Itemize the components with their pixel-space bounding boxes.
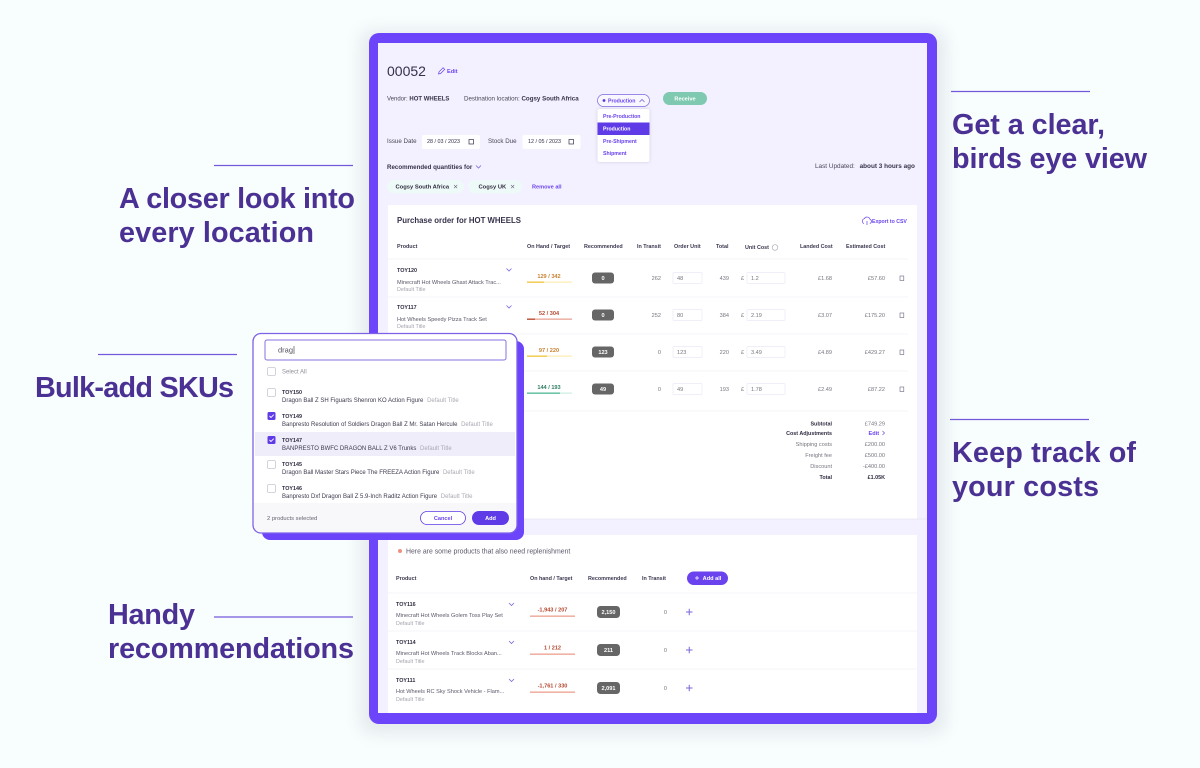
- row: TOY120: 1.2: [751, 276, 759, 282]
- date fields: [387, 135, 580, 149]
- row: third product: 0: [658, 350, 661, 356]
- cost totals: -£400.00: [863, 464, 885, 470]
- row: TOY117: 2.19: [751, 313, 762, 319]
- item: TOY149: Banpresto Resolution of Soldiers Dragon Ball Z Mr. Satan Hercule Default Title: [282, 422, 493, 428]
- panel: bulk-add SKUs modal: [253, 334, 524, 540]
- status dropdown: Production: [603, 126, 630, 132]
- receive button: [663, 92, 707, 105]
- row: TOY120: £1.68: [818, 276, 832, 282]
- export to CSV link: [862, 217, 907, 225]
- row: fourth product: 0: [658, 387, 661, 393]
- recommended quantities selector: Recommended quantities for: [387, 164, 473, 171]
- heading: get a clear, birds eye view: [951, 92, 1148, 175]
- search input: [265, 340, 506, 360]
- row: TOY111: [388, 669, 917, 703]
- location chips: Cogsy UK: [478, 185, 507, 191]
- row: TOY117: TOY117: [397, 305, 417, 311]
- date fields: 12 / 05 / 2023: [528, 139, 561, 145]
- row: fourth product: [388, 371, 908, 394]
- row: TOY117: 384: [720, 313, 729, 319]
- location chips: [387, 180, 562, 194]
- date fields: Stock Due: [488, 138, 517, 145]
- cost totals: Edit: [868, 431, 879, 437]
- table header: Landed Cost: [800, 244, 833, 250]
- table header: [397, 244, 885, 251]
- cost totals: £749.29: [865, 422, 885, 428]
- row: TOY117: Hot Wheels Speedy Pizza Track Set: [397, 317, 487, 323]
- row: third product: 3.49: [751, 350, 762, 356]
- panel: app window frame: [360, 30, 946, 734]
- receive button: Receive: [674, 96, 696, 102]
- add all button: Add all: [703, 576, 722, 582]
- row: TOY114: Minecraft Hot Wheels Track Blocks Aban...: [396, 651, 502, 657]
- location chips: Remove all: [532, 185, 562, 191]
- cancel button: Cancel: [434, 516, 453, 522]
- export to CSV link: Export to CSV: [872, 219, 907, 225]
- table header: Product: [397, 244, 418, 250]
- item: TOY149: TOY149: [282, 414, 302, 420]
- heading: keep track of your costs: your costs: [952, 471, 1099, 503]
- note: Here are some products that also need replenishment: [406, 548, 570, 556]
- status dropdown: Production: [608, 98, 635, 104]
- row: TOY111: Default Title: [396, 697, 424, 703]
- row: fourth product: 193: [720, 387, 729, 393]
- status dropdown: [598, 94, 650, 162]
- cost totals: £1.05K: [868, 475, 885, 481]
- vendor and destination: Destination location: Cogsy South Africa: [464, 96, 579, 102]
- date fields: 28 / 03 / 2023: [427, 139, 460, 145]
- row: TOY114: 211: [604, 648, 613, 654]
- table header: On hand / Target: [530, 576, 573, 582]
- heading: a closer look into every location: [119, 166, 355, 249]
- row: TOY111: Hot Wheels RC Sky Shock Vehicle - Flam...: [396, 689, 505, 695]
- heading: bulk-add SKUs: Bulk-add SKUs: [35, 372, 234, 404]
- row: TOY114: TOY114: [396, 640, 416, 646]
- item: TOY146: [268, 484, 473, 500]
- item: TOY146: TOY146: [282, 486, 302, 492]
- item: TOY145: Dragon Ball Master Stars Piece The FREEZA Action Figure Default Title: [282, 470, 475, 476]
- row: TOY120: £: [741, 276, 745, 282]
- table header: Product: [396, 576, 417, 582]
- row: third product: £429.27: [865, 350, 885, 356]
- row: TOY117: 252: [652, 313, 661, 319]
- row: TOY114: 1 / 212: [544, 646, 561, 652]
- item: TOY150: Dragon Ball Z SH Figuarts Shenron KO Action Figure Default Title: [282, 398, 459, 404]
- row: fourth product: 1.78: [751, 387, 762, 393]
- table header: Order Unit: [674, 244, 701, 250]
- item: TOY147 selected: [255, 432, 515, 456]
- heading: a closer look into every location: A closer look into: [119, 183, 355, 215]
- last updated: Last Updated: about 3 hours ago: [815, 163, 915, 170]
- vendor and destination: [387, 96, 579, 102]
- row: TOY116: 2,150: [602, 610, 616, 616]
- modal footer: [254, 503, 516, 532]
- heading: handy recommendations: Handy: [108, 599, 195, 631]
- row: TOY116: Minecraft Hot Wheels Golem Toss Play Set: [396, 613, 503, 619]
- table header: Recommended: [588, 576, 627, 582]
- vendor and destination: Vendor: HOT WHEELS: [387, 96, 449, 102]
- status dropdown: Shipment: [603, 151, 627, 157]
- row: TOY117: £: [741, 313, 745, 319]
- row: fourth product: £: [741, 387, 745, 393]
- cancel button: [420, 512, 466, 524]
- item: TOY150: TOY150: [282, 390, 302, 396]
- status dropdown: Pre-Shipment: [603, 139, 637, 145]
- heading: keep track of your costs: [950, 420, 1136, 503]
- row: TOY114: [388, 631, 917, 665]
- item: TOY146: Banpresto Dxf Dragon Ball Z 5.9-Inch Raditz Action Figure Default Title: [282, 494, 473, 500]
- order number: 00052: [387, 63, 426, 79]
- table header: Estimated Cost: [846, 244, 885, 250]
- row: TOY120: £57.60: [868, 276, 885, 282]
- table header: Recommended: [584, 244, 623, 250]
- row: third product: 97 / 220: [539, 348, 559, 354]
- row: fourth product: 49: [600, 387, 606, 393]
- panel: replenishment recommendations: [388, 519, 927, 713]
- row: TOY117: £3.07: [818, 313, 832, 319]
- heading: handy recommendations: recommendations: [108, 633, 354, 665]
- row: TOY117: [388, 297, 908, 330]
- row: third product: £4.89: [818, 350, 832, 356]
- heading: a closer look into every location: every location: [119, 217, 314, 249]
- item: TOY145: TOY145: [282, 462, 302, 468]
- row: TOY120: 439: [720, 276, 729, 282]
- table header: [396, 576, 666, 582]
- cost totals: Cost Adjustments: [786, 431, 832, 437]
- row: TOY116: [388, 593, 917, 627]
- cost totals: Discount: [810, 464, 832, 470]
- cost totals: £200.00: [865, 442, 885, 448]
- cost totals: Subtotal: [810, 422, 832, 428]
- search input: drag: [278, 346, 293, 354]
- row: fourth product: £2.49: [818, 387, 832, 393]
- item: TOY147 selected: BANPRESTO BWFC DRAGON BALL Z V6 Trunks Default Title: [282, 446, 452, 452]
- add all button: [687, 572, 728, 585]
- row: TOY116: 0: [664, 610, 667, 616]
- row: third product: 220: [720, 350, 729, 356]
- row: TOY120: 48: [677, 276, 683, 282]
- row: third product: [388, 334, 908, 358]
- heading: keep track of your costs: Keep track of: [952, 437, 1136, 469]
- row: TOY117: Default Title: [397, 324, 425, 330]
- status dropdown: Pre-Production: [603, 114, 640, 120]
- select all: Select All: [282, 370, 307, 376]
- table header: Total: [716, 244, 729, 250]
- row: third product: £: [741, 350, 745, 356]
- row: TOY116: TOY116: [396, 602, 416, 608]
- add button: [472, 511, 509, 525]
- item: TOY147 selected: TOY147: [282, 438, 302, 444]
- row: TOY117: 52 / 304: [539, 311, 560, 317]
- row: TOY111: 2,091: [602, 686, 616, 692]
- row: TOY117: 0: [601, 313, 605, 319]
- row: TOY116: -1,943 / 207: [538, 608, 567, 614]
- row: TOY120: Minecraft Hot Wheels Ghast Attack Trac...: [397, 280, 501, 286]
- row: third product: 123: [677, 350, 686, 356]
- location chips: Cogsy South Africa: [396, 185, 450, 191]
- cost totals: [786, 422, 885, 481]
- row: TOY117: £175.20: [865, 313, 885, 319]
- row: TOY114: Default Title: [396, 659, 424, 665]
- row: third product: 123: [598, 350, 608, 356]
- date fields: Issue Date: [387, 138, 417, 145]
- table header: Unit Cost: [745, 245, 769, 251]
- table header: On Hand / Target: [527, 244, 570, 250]
- edit link: [438, 68, 458, 75]
- cost totals: £500.00: [865, 453, 885, 459]
- row: TOY116: Default Title: [396, 621, 424, 627]
- row: TOY114: 0: [664, 648, 667, 654]
- cost totals: Shipping costs: [796, 442, 832, 448]
- table header: In Transit: [642, 576, 666, 582]
- row: TOY120: 129 / 342: [537, 274, 561, 280]
- row: TOY111: 0: [664, 686, 667, 692]
- heading: handy recommendations: [108, 599, 354, 665]
- select all: [268, 368, 307, 376]
- cost totals: Freight fee: [805, 453, 832, 459]
- table title: Purchase order for HOT WHEELS: [397, 216, 521, 225]
- heading: get a clear, birds eye view: birds eye view: [952, 143, 1148, 175]
- item: TOY150: [268, 388, 459, 404]
- modal footer: 2 products selected: [267, 516, 317, 522]
- row: TOY117: 80: [677, 313, 683, 319]
- order header: [387, 63, 915, 194]
- item: TOY149: [268, 412, 493, 428]
- add button: Add: [485, 516, 497, 522]
- row: TOY120: Default Title: [397, 287, 425, 293]
- row: fourth product: £87.22: [868, 387, 885, 393]
- table header: In Transit: [637, 244, 661, 250]
- row: TOY120: 0: [601, 276, 605, 282]
- cost totals: Total: [820, 475, 832, 481]
- edit link: Edit: [447, 69, 458, 75]
- panel: purchase order table: [388, 205, 917, 519]
- row: fourth product: 49: [677, 387, 683, 393]
- row: fourth product: 144 / 193: [537, 385, 561, 391]
- row: TOY111: TOY111: [396, 678, 415, 684]
- heading: get a clear, birds eye view: Get a clear,: [952, 109, 1105, 141]
- row: TOY111: -1,761 / 330: [538, 684, 567, 690]
- row: TOY120: [388, 259, 908, 293]
- item: TOY145: [268, 460, 475, 476]
- row: TOY120: 262: [652, 276, 661, 282]
- row: TOY120: TOY120: [397, 268, 417, 274]
